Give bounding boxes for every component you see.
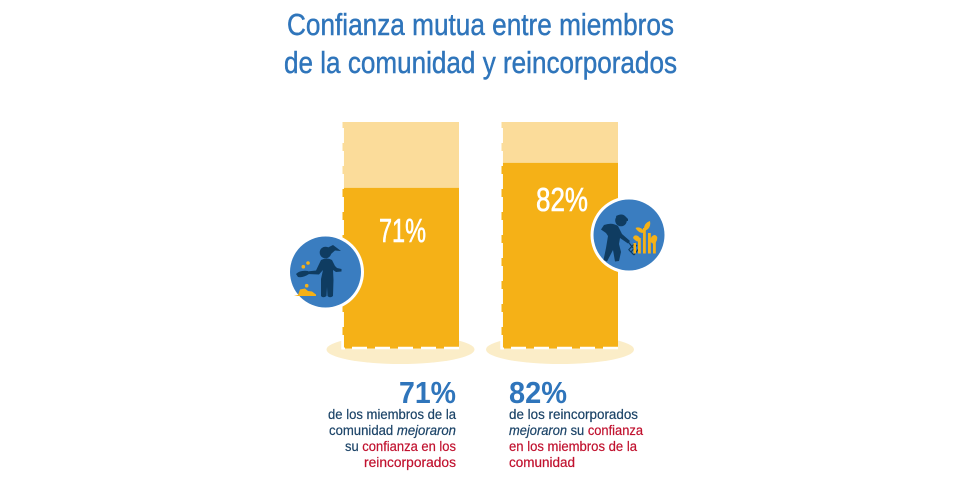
right bar value: 82% bbox=[536, 181, 588, 218]
caption: 82%: 82% bbox=[509, 375, 567, 410]
left bar value: 71% bbox=[379, 212, 426, 249]
caption: 82%: comunidad bbox=[509, 455, 575, 470]
caption: 82%: mejoraron su confianza bbox=[509, 423, 643, 438]
caption: 82% bbox=[509, 375, 643, 470]
left bar chart: 71% bbox=[326, 122, 474, 364]
caption: 71%: reincorporados bbox=[364, 455, 456, 470]
caption: 71%: su confianza en los bbox=[345, 439, 456, 454]
right bar chart: 82% bbox=[486, 122, 634, 364]
caption: 71%: de los miembros de la bbox=[328, 407, 456, 422]
caption: 82%: en los miembros de la bbox=[509, 439, 637, 454]
title bbox=[284, 7, 677, 80]
caption: 82%: de los reincorporados bbox=[509, 407, 638, 422]
caption: 71% bbox=[328, 375, 456, 470]
title: Confianza mutua entre miembros bbox=[287, 7, 674, 42]
caption: 71%: comunidad mejoraron bbox=[329, 423, 456, 438]
icon: man with pitchfork and crops bbox=[590, 196, 668, 274]
icon: woman with shovel bbox=[287, 234, 364, 310]
caption: 71%: 71% bbox=[399, 375, 456, 410]
title: de la comunidad y reincorporados bbox=[284, 45, 677, 80]
